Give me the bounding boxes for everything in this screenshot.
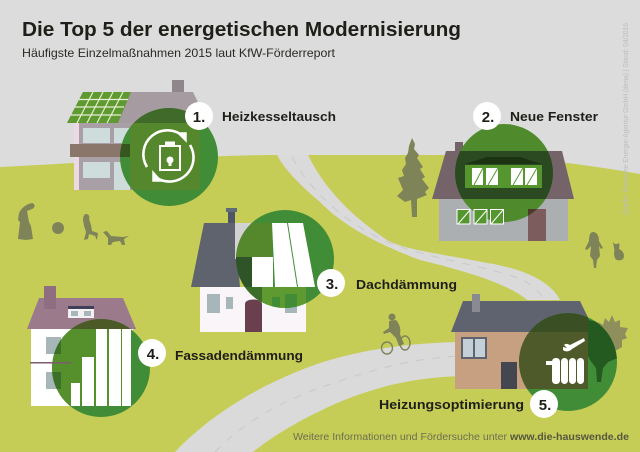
label 2: Neue Fenster xyxy=(510,109,598,124)
icon: boiler with rotation arrows xyxy=(143,130,194,182)
badge 1 xyxy=(185,102,213,130)
badge 4 xyxy=(138,339,166,367)
house 5 xyxy=(451,294,595,389)
subtitle: Häufigste Einzelmaßnahmen 2015 laut KfW-Förderreport xyxy=(22,46,336,60)
badge 2 xyxy=(473,102,501,130)
house 1 with solar roof xyxy=(67,80,208,190)
badge 2: 2. xyxy=(482,109,494,126)
badge 5: 5. xyxy=(539,397,551,414)
house 4 xyxy=(27,286,136,406)
lens circle 2: new windows xyxy=(455,124,553,222)
insulation bars xyxy=(71,329,131,406)
icon: radiator xyxy=(546,358,584,384)
icon: wrench xyxy=(563,338,585,351)
badge 1: 1. xyxy=(193,109,205,126)
title: Die Top 5 der energetischen Modernisierung xyxy=(22,19,461,41)
label 1: Heizkesseltausch xyxy=(222,109,336,124)
lens circle 5: heating optimisation xyxy=(519,313,617,411)
green hill xyxy=(0,155,640,452)
label 5: Heizungsoptimierung xyxy=(379,397,524,412)
footer link text: Weitere Informationen und Fördersuche unter www.die-hauswende.de xyxy=(293,431,629,443)
silhouette: girl xyxy=(585,232,603,268)
lens circle 3: roof insulation xyxy=(236,210,334,308)
insulation panels xyxy=(252,223,315,287)
window below lens 3 xyxy=(285,308,297,313)
badge 3 xyxy=(317,269,345,297)
cyclist xyxy=(382,314,410,354)
label 3: Dachdämmung xyxy=(356,277,457,292)
source note: Quelle: Deutsche Energie-Agentur GmbH (dena) | Stand: 04/2016 xyxy=(621,23,630,215)
badge 4: 4. xyxy=(147,346,159,363)
badge 5 xyxy=(530,390,558,418)
fir tree xyxy=(397,138,429,217)
lens circle 1: boiler replacement xyxy=(120,108,218,206)
lower windows of house 2 xyxy=(457,210,504,224)
silhouette: cat xyxy=(613,242,624,260)
tree behind house 5 xyxy=(598,315,628,354)
lens circle 4: facade insulation xyxy=(50,315,150,417)
road: upper winding road xyxy=(277,155,560,300)
badge 3: 3. xyxy=(326,276,338,293)
house 3 xyxy=(191,208,306,332)
road: lower road xyxy=(175,342,470,452)
facade line xyxy=(30,362,71,364)
silhouette: family with ball and dog xyxy=(18,203,129,245)
label 4: Fassadendämmung xyxy=(175,348,303,363)
house 2 xyxy=(432,142,574,241)
